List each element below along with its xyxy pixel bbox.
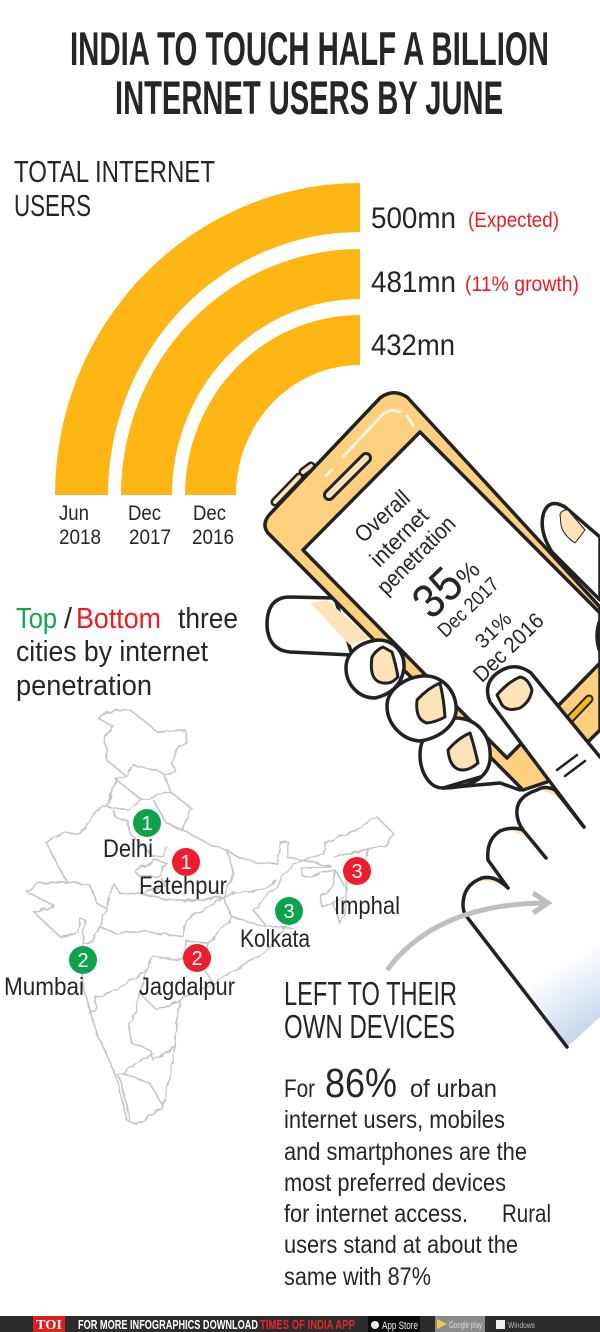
body text: most preferred devices (284, 1169, 506, 1197)
marker: Fatehpur: 1 (180, 852, 192, 874)
city labels: Imphal (334, 892, 400, 920)
phone screen text: 35 (402, 557, 474, 629)
arc date labels: 2017 (129, 526, 171, 549)
arc date labels: 2018 (59, 526, 101, 549)
city labels: Delhi (103, 835, 153, 863)
city labels: Mumbai (4, 973, 84, 1001)
city markers (69, 809, 371, 974)
arc value labels: 481mn (371, 266, 456, 299)
phone screen text: 31% (471, 608, 517, 653)
map of India (27, 710, 393, 1125)
heading: total internet users (14, 154, 215, 223)
arc value labels: 500mn (371, 202, 456, 235)
heading: top and bottom cities: three (178, 603, 238, 635)
marker: Kolkata: 3 (283, 901, 295, 923)
phone screen text: Overall (349, 485, 415, 547)
arrow (387, 893, 548, 970)
finger three (420, 718, 520, 790)
arc chart (55, 183, 360, 495)
back finger right (542, 503, 600, 600)
body text: 86% (325, 1060, 397, 1106)
arc date labels: Jun (59, 502, 89, 525)
illustration: hand holding phone (265, 393, 600, 1047)
finger two (387, 676, 456, 741)
marker: Delhi (133, 809, 161, 837)
phone highlight (326, 410, 413, 476)
body text: Rural (502, 1200, 551, 1228)
phone speaker (329, 458, 366, 495)
body text: For (284, 1075, 315, 1103)
heading: top and bottom cities: Bottom (76, 603, 161, 635)
footer bar: App Store (382, 1320, 418, 1332)
heading: total internet users: TOTAL INTERNET (14, 154, 215, 189)
marker: Imphal: 3 (351, 861, 363, 883)
heading: top and bottom cities: cities by internet (16, 636, 208, 668)
body text: same with 87% (284, 1263, 431, 1291)
marker: Jagdalpur: 2 (191, 948, 203, 970)
phone screen text: internet (364, 502, 434, 572)
footer bar: Google play (449, 1320, 482, 1330)
home button slot (569, 699, 589, 720)
title (70, 22, 549, 124)
arc value labels: 432mn (371, 329, 455, 362)
marker: Fatehpur (172, 848, 200, 876)
finger one (346, 640, 404, 698)
marker: Mumbai (69, 946, 97, 974)
heading: left to their own devices: LEFT TO THEIR (284, 975, 457, 1012)
footer bar: FOR MORE INFOGRAPHICS DOWNLOAD (78, 1317, 258, 1332)
body text (284, 1060, 551, 1291)
city labels: Jagdalpur (139, 973, 235, 1001)
body text: of urban (410, 1075, 497, 1103)
arc date labels: 2016 (192, 526, 234, 549)
phone side buttons (275, 466, 311, 502)
heading: top and bottom cities (16, 603, 238, 702)
arc value labels: (11% growth) (465, 273, 579, 296)
body text: users stand at about the (284, 1231, 518, 1259)
phone screen text: Dec 2016 (468, 608, 549, 687)
footer bar: Windows (508, 1321, 535, 1330)
body text: internet users, mobiles (284, 1106, 505, 1134)
city labels: Fatehpur (139, 872, 227, 900)
marker: Delhi: 1 (141, 813, 153, 835)
marker: Imphal (343, 857, 371, 885)
heading: left to their own devices (284, 975, 457, 1045)
heading: top and bottom cities: penetration (16, 670, 152, 702)
marker: Jagdalpur (183, 944, 211, 972)
heading: left to their own devices: OWN DEVICES (284, 1008, 455, 1045)
arc date labels: Dec (128, 502, 161, 525)
lower hand knuckles (463, 785, 600, 1047)
heading: total internet users: USERS (14, 188, 91, 223)
phone screen text: penetration (371, 510, 461, 600)
footer bar: TIMES OF INDIA APP (260, 1317, 355, 1332)
arc date labels: Dec (193, 502, 226, 525)
marker: Mumbai: 2 (77, 950, 89, 972)
phone screen text: % (451, 556, 486, 591)
palm curve (597, 620, 600, 652)
back finger left (267, 597, 370, 655)
heading: top and bottom cities: Top (16, 603, 57, 635)
marker: Kolkata (275, 897, 303, 925)
phone screen (303, 432, 600, 758)
arc value labels: (Expected) (468, 209, 559, 232)
arc date labels (59, 502, 234, 549)
city labels: Kolkata (240, 925, 310, 953)
thumb (488, 667, 600, 900)
phone body (265, 393, 600, 790)
city labels (4, 835, 400, 1001)
footer bar (0, 1316, 600, 1332)
heading: top and bottom cities: / (64, 603, 73, 635)
phone screen text (349, 485, 549, 687)
body text: and smartphones are the (284, 1138, 527, 1166)
phone screen text: Dec 2017 (434, 573, 504, 642)
arc value labels (371, 202, 579, 362)
body text: for internet access. (284, 1200, 468, 1228)
